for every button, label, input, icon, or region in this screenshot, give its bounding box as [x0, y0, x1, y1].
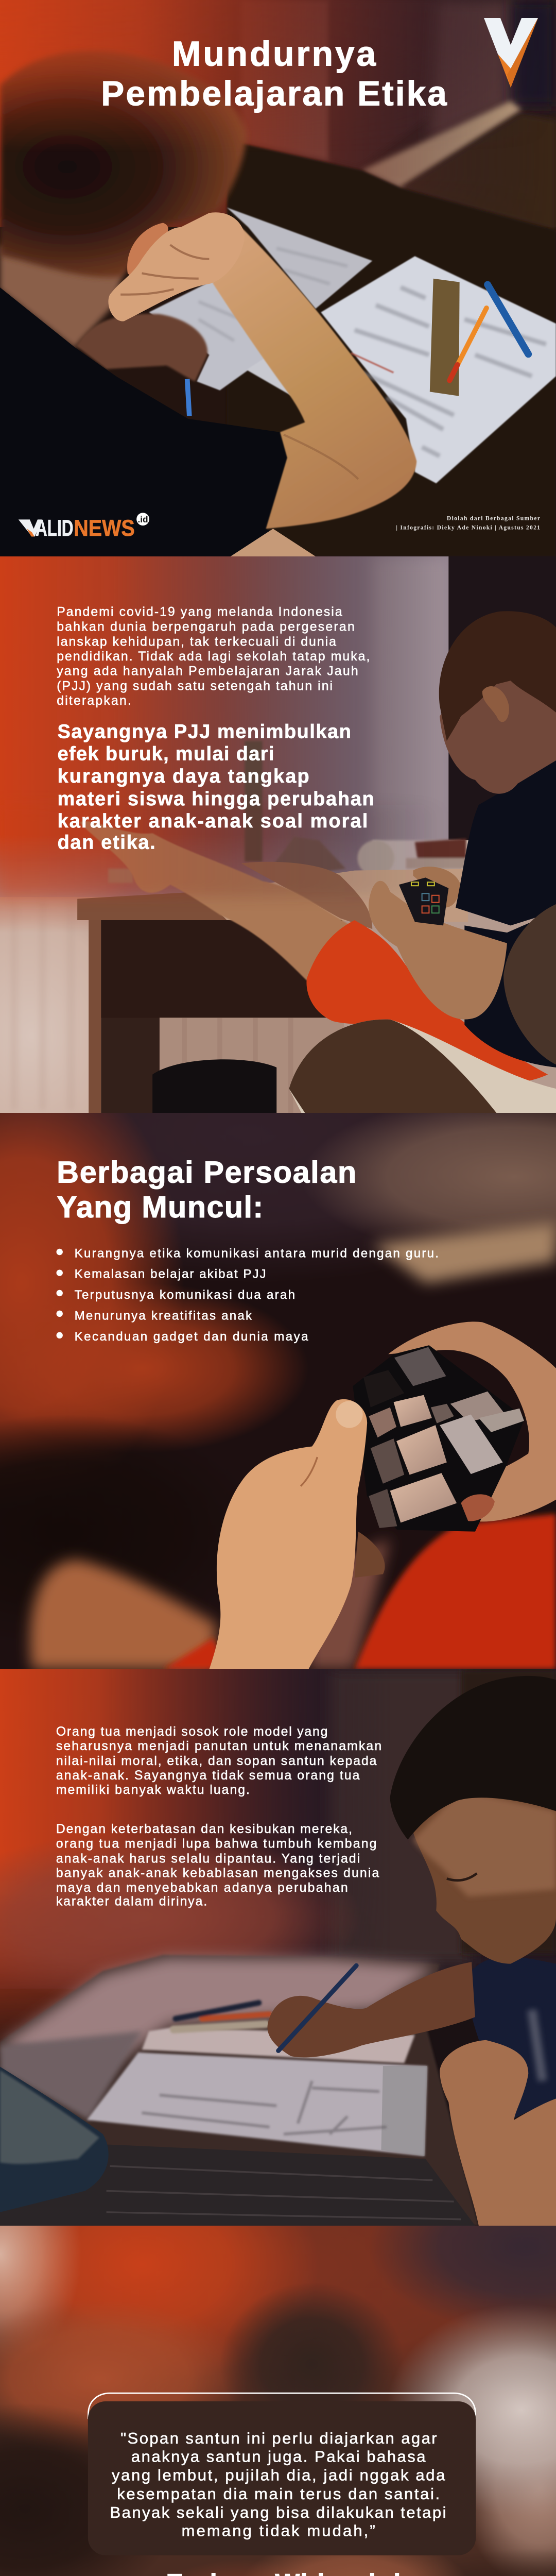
panel: cover photo with title: [0, 0, 556, 556]
first paragraph: nilai-nilai moral, etika, dan sopan santun kepada: [56, 1754, 377, 1768]
boy: shorts: [306, 920, 548, 1082]
quote text: yang lembut, pujilah dia, jadi nggak ada: [112, 2466, 445, 2484]
first paragraph: seharusnya menjadi panutan untuk menanamkan: [56, 1739, 381, 1753]
desk items: [108, 741, 466, 883]
second paragraph: anak-anak harus selalu dipantau. Yang terjadi: [56, 1852, 360, 1866]
title: Pembelajaran Etika: [101, 75, 447, 113]
quote box: [88, 2393, 476, 2555]
boy: hair and neck: [0, 0, 350, 349]
ruler: [430, 279, 460, 396]
intro paragraph: lanskap kehidupan, tak terkecuali di dunia: [57, 635, 336, 649]
background wall and curtains: [0, 556, 556, 1113]
table: [0, 1955, 479, 2226]
right hand: [388, 1321, 556, 1521]
intro paragraph: pendidikan. Tidak ada lagi sekolah tatap muka,: [57, 650, 370, 664]
logo: Validnews: .id: [138, 514, 148, 524]
boy: arm and hands: [369, 867, 507, 1020]
highlight paragraph: karakter anak-anak soal moral: [58, 810, 368, 832]
boy: writing arm with pen: [268, 1962, 475, 2057]
bullet list: Kecanduan gadget dan dunia maya: [75, 1330, 308, 1344]
boy: head: [390, 1676, 556, 1964]
pencil case: [0, 2066, 109, 2212]
highlight paragraph: [58, 721, 374, 854]
boy: lower hand with pen: [76, 314, 207, 416]
bullet list: [57, 1246, 439, 1344]
wooden table: [227, 140, 556, 556]
logo: Validnews: NEWS: [74, 516, 135, 541]
intro paragraph: diterapkan.: [57, 694, 131, 708]
heading: Berbagai Persoalan: [57, 1155, 356, 1190]
panel: intro with boy on chair: [0, 556, 556, 1113]
orange pen: [449, 308, 486, 380]
logo: Validnews: [19, 513, 149, 541]
second paragraph: banyak anak-anak kebablasan mengakses dunia: [56, 1867, 379, 1880]
bullet list: Menurunya kreatifitas anak: [75, 1309, 252, 1323]
cube: [353, 1345, 525, 1532]
quote text: [110, 2429, 446, 2540]
first paragraph: [56, 1725, 381, 1797]
bullet list: Kemalasan belajar akibat PJJ: [75, 1267, 266, 1281]
boy: shirt: [467, 1957, 556, 2120]
highlight paragraph: dan etika.: [58, 832, 155, 854]
boy: legs: [0, 805, 448, 980]
first paragraph: memiliki banyak waktu luang.: [56, 1783, 250, 1797]
intro paragraph: yang ada hanyalah Pembelajaran Jarak Jauh: [57, 665, 358, 679]
quote text: "Sopan santun ini perlu diajarkan agar: [120, 2429, 437, 2447]
blurred background: [0, 2226, 556, 2576]
source credit: Diolah dari Berbagai Sumber: [447, 515, 540, 522]
quote text: Banyak sekali yang bisa dilakukan tetapi: [110, 2503, 446, 2521]
quote text: memang tidak mudah,”: [182, 2522, 375, 2540]
papers: [87, 2028, 427, 2156]
heading: Yang Muncul:: [57, 1190, 263, 1224]
second paragraph: karakter dalam dirinya.: [56, 1895, 207, 1909]
intro paragraph: bahkan dunia berpengaruh pada pergeseran: [57, 620, 355, 634]
second paragraph: orang tua menjadi lupa bahwa tumbuh kembang: [56, 1837, 376, 1851]
panel: parents with boy writing: [0, 1669, 556, 2226]
boy: resting arm: [440, 2040, 556, 2226]
highlight paragraph: kurangnya daya tangkap: [58, 766, 309, 787]
pens: [174, 2003, 269, 2029]
second paragraph: maya dan menyebabkan adanya perubahan: [56, 1881, 348, 1895]
blurred background: [0, 1113, 556, 1669]
boy: shirt: [0, 287, 316, 556]
logo: Validnews: ALID: [36, 516, 74, 541]
left hand: [209, 1399, 367, 1669]
quote text: anaknya santun juga. Pakai bahasa: [131, 2448, 426, 2466]
quote text: kesempatan dia main terus dan santai.: [117, 2485, 440, 2503]
first paragraph: anak-anak. Sayangnya tidak semua orang tua: [56, 1769, 360, 1783]
boy: head: [439, 611, 556, 794]
source credit: | Infografis: Dieky Ade Ninoki | Agustus 2021: [396, 524, 540, 531]
heading: [57, 1155, 356, 1224]
basket: [152, 1059, 276, 1113]
icon: V logo: [484, 18, 538, 88]
second paragraph: [56, 1822, 379, 1909]
boy: torso: [464, 911, 556, 1067]
first paragraph: Orang tua menjadi sosok role model yang: [56, 1725, 327, 1739]
boy: shirt sleeve: [456, 760, 556, 925]
intro paragraph: [57, 605, 370, 708]
source credit: [396, 515, 540, 531]
title: Mundurnya: [172, 35, 376, 73]
blue pen: [488, 284, 528, 354]
panel: problems with cube: [0, 1113, 556, 1669]
intro paragraph: (PJJ) yang sudah satu setengah tahun ini: [57, 680, 333, 693]
boy: arm and resting hand: [108, 212, 416, 556]
chair: [289, 1020, 556, 1113]
second paragraph: Dengan keterbatasan dan kesibukan mereka,: [56, 1822, 352, 1836]
title: [101, 35, 447, 113]
highlight paragraph: Sayangnya PJJ menimbulkan: [58, 721, 351, 743]
chair back: [503, 904, 556, 1064]
icon: puzzle cube: [399, 877, 448, 925]
papers on table: [149, 208, 556, 483]
intro paragraph: Pandemi covid-19 yang melanda Indonesia: [57, 605, 342, 619]
background wall: [0, 1669, 556, 2045]
bullet list: Terputusnya komunikasi dua arah: [75, 1288, 295, 1302]
highlight paragraph: materi siswa hingga perubahan: [58, 788, 374, 810]
highlight paragraph: efek buruk, mulai dari: [58, 743, 274, 765]
desk: [77, 869, 468, 1113]
panel: quote: [0, 2226, 556, 2576]
background wall: [0, 0, 556, 231]
bullet list: Kurangnya etika komunikasi antara murid dengan guru.: [75, 1246, 439, 1260]
